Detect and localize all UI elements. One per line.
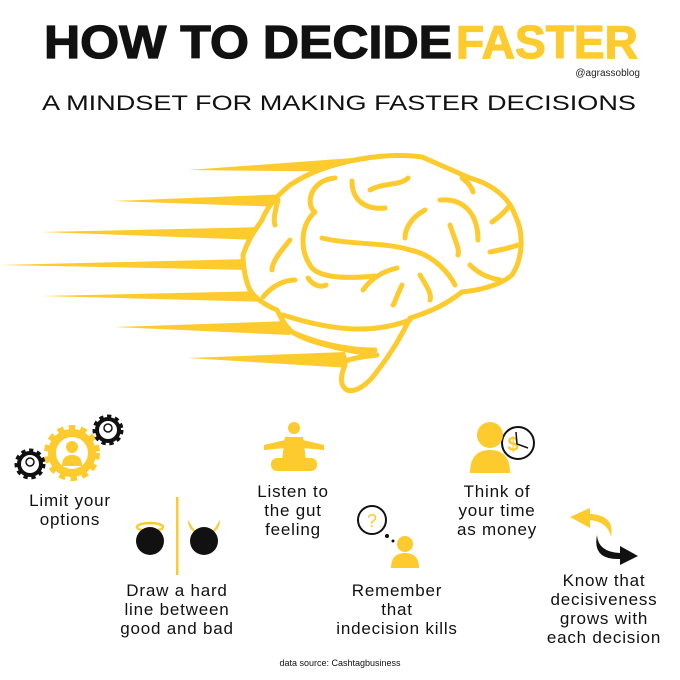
text: decisiveness grows: decisiveness xyxy=(551,590,657,609)
text: think of time as money: as money xyxy=(457,520,537,539)
text: draw a hard line: line between xyxy=(124,600,230,619)
text: draw a hard line: Draw a hard xyxy=(126,581,228,600)
text: decisiveness grows xyxy=(547,571,661,647)
text: listen to the gut xyxy=(257,482,329,539)
credit: @agrassoblog xyxy=(575,68,640,79)
speed lines xyxy=(0,156,380,368)
text: think of time as money: Think of xyxy=(464,482,530,501)
text: remember indecision kills: that xyxy=(381,600,413,619)
icon: time money xyxy=(470,422,534,473)
text: limit your options: Limit your xyxy=(29,491,111,510)
icon: thinking person: ? xyxy=(367,511,377,531)
icon: gears xyxy=(17,417,121,477)
title: FASTER xyxy=(456,16,638,68)
icon: meditation xyxy=(264,422,324,471)
text: limit your options: options xyxy=(40,510,100,529)
text: listen to the gut: Listen to xyxy=(257,482,329,501)
icon: arrows xyxy=(570,508,638,565)
text: decisiveness grows: each decision xyxy=(547,628,661,647)
text: remember indecision kills: Remember xyxy=(352,581,442,600)
text: remember indecision kills: indecision kills xyxy=(336,619,458,638)
data source: data source: Cashtagbusiness xyxy=(279,658,401,668)
text: draw a hard line: good and bad xyxy=(120,619,234,638)
text: think of time as money: your time xyxy=(458,501,536,520)
text: decisiveness grows: Know that xyxy=(563,571,645,590)
text: listen to the gut: the gut xyxy=(264,501,322,520)
title xyxy=(44,16,638,68)
text: remember indecision kills xyxy=(336,581,458,638)
text: listen to the gut: feeling xyxy=(265,520,321,539)
text: draw a hard line xyxy=(120,581,234,638)
text: think of time as money xyxy=(457,482,537,539)
text: decisiveness grows: grows with xyxy=(560,609,648,628)
brain xyxy=(243,155,521,391)
subtitle: A MINDSET FOR MAKING FASTER DECISIONS xyxy=(42,92,636,115)
text: limit your options xyxy=(29,491,111,529)
icon: time money: $ xyxy=(507,434,519,456)
icon: thinking person xyxy=(358,506,419,568)
title: HOW TO DECIDE xyxy=(44,16,452,68)
icon: angel and devil xyxy=(136,497,220,575)
